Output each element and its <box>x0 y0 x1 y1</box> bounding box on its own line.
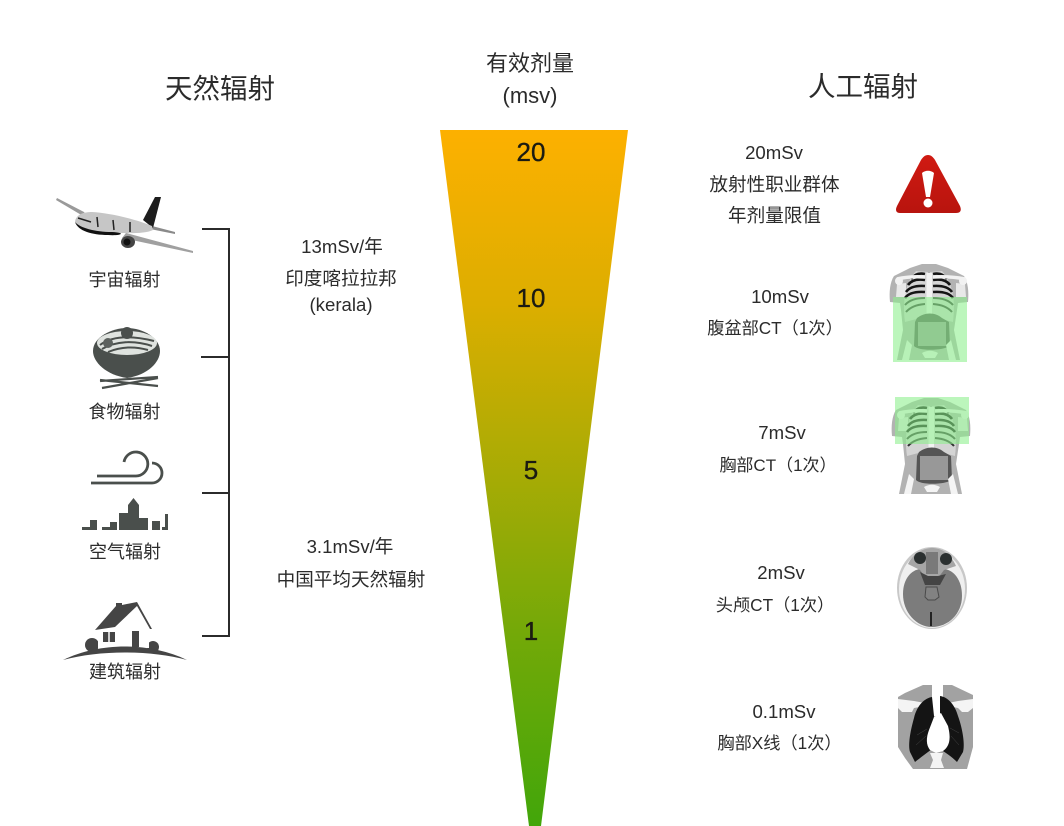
label: food radiation: 食物辐射 <box>88 402 160 422</box>
text: chest X-ray <box>717 701 842 753</box>
heading: effective dose: 有效剂量 <box>486 51 574 76</box>
text: chest CT: 胸部CT（1次） <box>719 456 837 475</box>
callout: Kerala: 印度喀拉拉邦 <box>285 268 397 289</box>
callout: Kerala: 13mSv/年 <box>301 236 383 257</box>
icon: noodle bowl <box>93 327 160 388</box>
heading: effective dose: (msv) <box>503 83 557 108</box>
text: head CT <box>716 562 834 615</box>
heading: effective dose <box>486 51 574 108</box>
text: chest X-ray: 胸部X线（1次） <box>717 733 842 753</box>
label: air radiation: 空气辐射 <box>89 542 161 562</box>
text: abdominal CT: 腹盆部CT（1次） <box>707 318 843 338</box>
text: occupational limit <box>709 142 840 226</box>
icon: house on a hill <box>63 602 187 660</box>
text: head CT: 头颅CT（1次） <box>716 595 834 615</box>
icon: torso with chest highlighted <box>892 397 970 494</box>
text: chest X-ray: 0.1mSv <box>752 701 816 722</box>
callout: China average: 3.1mSv/年 <box>307 536 393 557</box>
callout: Kerala <box>285 236 397 315</box>
icon: torso with abdomen and pelvis highlighted <box>890 264 968 362</box>
icon: head CT slice <box>897 547 967 629</box>
callout: China average <box>277 536 425 590</box>
text: abdominal CT: 10mSv <box>751 286 810 307</box>
text: occupational limit: 放射性职业群体 <box>709 174 840 195</box>
text: occupational limit: 20mSv <box>745 142 804 163</box>
heading: artificial radiation: 人工辐射 <box>808 71 918 102</box>
label: building radiation: 建筑辐射 <box>89 662 161 682</box>
dose scale triangle <box>440 130 628 826</box>
scale value 5: 5 <box>524 455 538 485</box>
scale value 20: 20 <box>517 137 545 167</box>
scale value 1: 1 <box>524 616 538 646</box>
text: occupational limit: 年剂量限值 <box>728 205 821 226</box>
text: chest CT <box>719 422 837 475</box>
callout: Kerala: (kerala) <box>309 294 373 315</box>
text: head CT: 2mSv <box>757 562 805 583</box>
heading: natural radiation: 天然辐射 <box>165 73 275 104</box>
bracket grouping natural sources <box>201 229 229 636</box>
icon: wind <box>91 452 162 483</box>
icon: chest X-ray <box>898 685 973 769</box>
callout: China average: 中国平均天然辐射 <box>277 569 425 590</box>
scale value 10: 10 <box>517 283 545 313</box>
label: cosmic radiation: 宇宙辐射 <box>88 270 160 290</box>
icon: warning triangle <box>896 155 961 213</box>
icon: city skyline <box>82 498 168 530</box>
icon: airplane <box>56 197 193 253</box>
text: chest CT: 7mSv <box>758 422 806 443</box>
text: abdominal CT <box>707 286 843 338</box>
